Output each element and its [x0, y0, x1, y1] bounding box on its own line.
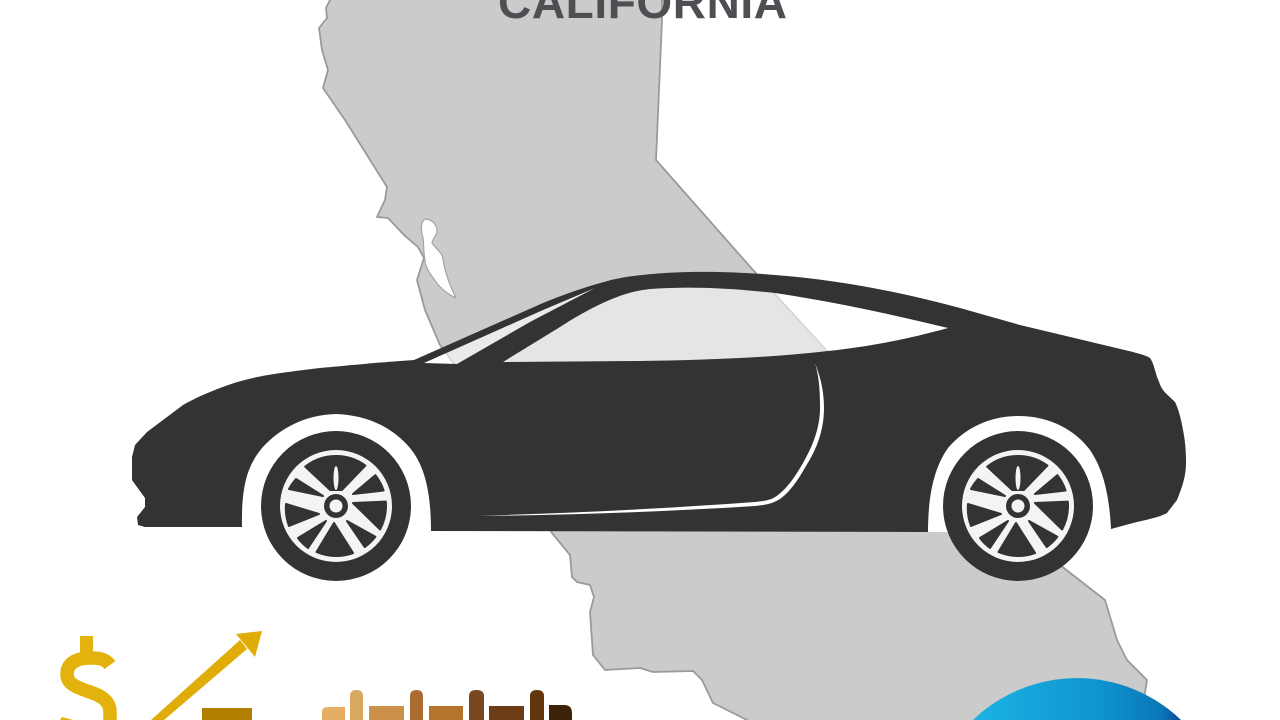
- car: wheel arches: [242, 414, 1111, 532]
- dollar sign curve: [67, 658, 110, 720]
- bar 2: [350, 690, 363, 720]
- map: California silhouette: [319, 0, 1147, 720]
- car: front quarter window: [424, 288, 595, 364]
- icon: blue circle: [973, 678, 1181, 720]
- car: door line: [475, 363, 824, 516]
- icon: dollar and rising arrow: [60, 631, 262, 720]
- car: main side window: [503, 288, 948, 362]
- bar 1: [322, 707, 345, 720]
- bar 8: [530, 690, 544, 720]
- arrow head: [236, 631, 262, 657]
- rising arrow shaft: [151, 640, 247, 720]
- car: rear wheel: [943, 431, 1093, 581]
- bar 5: [429, 706, 463, 720]
- bar 4: [410, 690, 423, 720]
- car: rear quarter window: [775, 293, 948, 351]
- icon: skin tone bars: [322, 690, 572, 720]
- bar 7: [489, 706, 524, 720]
- rising bar: [202, 708, 252, 720]
- bar 6: [469, 690, 484, 720]
- car: body: [132, 272, 1186, 532]
- map: bay inlet: [421, 219, 456, 298]
- dollar sign bar: [80, 636, 93, 656]
- bar 9: [549, 705, 572, 720]
- bar 3: [369, 706, 404, 720]
- car: front wheel: [261, 431, 411, 581]
- dollar sign lower tip: [60, 717, 73, 720]
- car: [132, 272, 1186, 581]
